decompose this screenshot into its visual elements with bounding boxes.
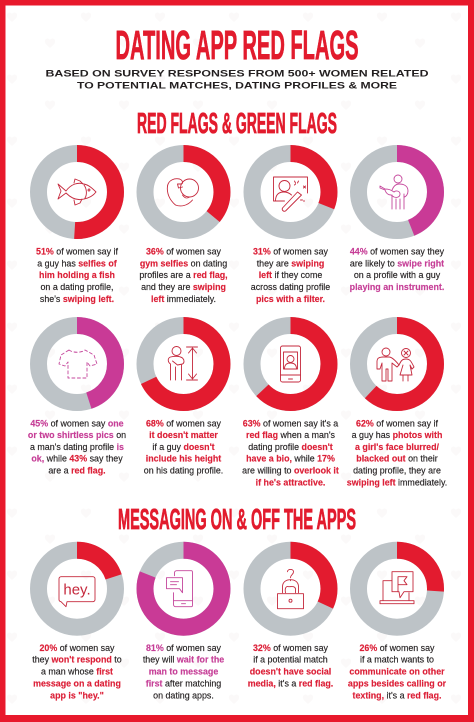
caption: communicate on other — [349, 667, 445, 677]
donut chart 36% — [145, 154, 222, 230]
donut chart 45% — [38, 326, 116, 402]
caption: they are swiping — [257, 258, 324, 268]
donut chart 63% — [252, 326, 329, 402]
panel: playing an instrument 44% — [350, 154, 445, 292]
caption: on his dating profile. — [144, 466, 223, 476]
caption: 32% of women say — [253, 643, 328, 653]
subtitle: BASED ON SURVEY RESPONSES FROM 500+ WOMEN RELATED — [46, 68, 429, 80]
caption: if a match wants to — [360, 655, 434, 665]
donut chart 51% — [38, 154, 116, 230]
caption: they will wait for the — [143, 655, 224, 665]
caption: apps besides calling or — [348, 678, 447, 688]
caption: if he's attractive. — [256, 477, 325, 487]
caption: 51% of women say if — [36, 247, 118, 257]
caption: 31% of women say — [253, 247, 328, 257]
caption: 45% of women say one — [30, 418, 124, 428]
donut chart 68% — [145, 326, 222, 402]
caption: on a dating profile, — [40, 282, 114, 292]
caption: first after matching — [146, 678, 221, 688]
caption: man to message — [149, 667, 218, 677]
caption: app is "hey." — [50, 690, 104, 700]
panel: blurred face 62% — [347, 326, 447, 487]
icon: fish — [58, 179, 96, 205]
panel: wait for the man 81% — [143, 550, 224, 700]
caption: 36% of women say — [146, 247, 221, 257]
caption: a man's dating profile is — [30, 442, 124, 452]
caption: pics with a filter. — [256, 294, 325, 304]
caption: ok, while 43% say they — [31, 454, 123, 464]
caption: left immediately. — [151, 294, 216, 304]
panel: hey message 20% — [32, 550, 122, 700]
icon: laptop with flag chat bubble — [380, 572, 414, 604]
caption: a man whose first — [41, 667, 113, 677]
panel: other apps 26% — [348, 550, 447, 700]
icon: woman at laptop with question mark — [278, 569, 304, 609]
subtitle: TO POTENTIAL MATCHES, DATING PROFILES & MORE — [77, 80, 397, 92]
caption: dating profile, they are — [353, 466, 441, 476]
caption: across dating profile — [251, 282, 330, 292]
icon: man with guitar — [380, 175, 408, 209]
caption: 26% of women say — [360, 643, 434, 653]
icon: flexed arm — [167, 179, 198, 206]
panel: filtered pics 31% — [251, 154, 330, 304]
caption: 20% of women say — [40, 643, 114, 653]
icon: photo with magic wand — [274, 177, 308, 211]
icon: dashed t-shirt — [59, 350, 97, 378]
caption: on dating apps. — [153, 690, 214, 700]
icon: phone with chat bubble — [166, 571, 192, 607]
caption: profiles are a red flag, — [139, 270, 228, 280]
caption: they won't respond to — [32, 655, 122, 665]
donut chart 44% — [358, 154, 436, 230]
caption: are a red flag. — [48, 466, 106, 476]
icon: man with height arrow — [168, 346, 198, 380]
caption: left if they come — [259, 270, 322, 280]
caption: 62% of women say if — [356, 418, 438, 428]
caption: are likely to swipe right — [350, 258, 444, 268]
caption: on a profile with a guy — [354, 270, 441, 280]
caption: blacked out on their — [356, 454, 438, 464]
caption: red flag when a man's — [246, 430, 335, 440]
caption: it doesn't matter — [149, 430, 218, 440]
caption: 81% of women say — [146, 643, 221, 653]
caption: swiping left immediately. — [347, 477, 447, 487]
donut chart 31% — [252, 154, 329, 230]
caption: playing an instrument. — [350, 282, 444, 292]
icon: phone with profile — [280, 346, 300, 382]
caption: if a guy doesn't — [152, 442, 215, 452]
caption: 68% of women say — [146, 418, 221, 428]
icon: hey speech bubble: hey. — [63, 582, 91, 599]
donut chart 20% — [38, 550, 116, 627]
caption: dating profile doesn't — [248, 442, 333, 452]
caption: she's swiping left. — [40, 294, 114, 304]
caption: a guy has photos with — [352, 430, 442, 440]
caption: or two shirtless pics on — [28, 430, 126, 440]
icon: hey speech bubble — [59, 577, 95, 607]
donut chart 32% — [252, 550, 329, 627]
panel: no bio 63% — [242, 326, 339, 487]
donut chart 81% — [145, 550, 222, 627]
panel: gym selfies 36% — [139, 154, 228, 304]
donut chart 26% — [358, 550, 436, 627]
caption: texting, it's a red flag. — [352, 690, 442, 700]
panel: shirtless pics 45% — [28, 326, 126, 476]
caption: a guy has selfies of — [37, 258, 117, 268]
caption: him holding a fish — [39, 270, 115, 280]
icon: couple with crossed-out face — [377, 348, 414, 381]
caption: and they are swiping — [141, 282, 226, 292]
panel: height 68% — [144, 326, 223, 476]
subtitle — [46, 68, 429, 92]
caption: 63% of women say it's a — [243, 418, 338, 428]
caption: have a bio, while 17% — [246, 454, 335, 464]
caption: media, it's a red flag. — [248, 678, 333, 688]
caption: gym selfies on dating — [140, 258, 227, 268]
caption: include his height — [146, 454, 221, 464]
caption: 44% of women say they — [350, 247, 444, 257]
caption: are willing to overlook it — [242, 466, 339, 476]
caption: doesn't have social — [250, 667, 331, 677]
caption: message on a dating — [33, 678, 121, 688]
panel: no social media 32% — [248, 550, 333, 688]
panel: fish selfies 51% — [36, 154, 118, 304]
caption: if a potential match — [253, 655, 328, 665]
donut chart 62% — [358, 326, 436, 402]
caption: a girl's face blurred/ — [355, 442, 440, 452]
